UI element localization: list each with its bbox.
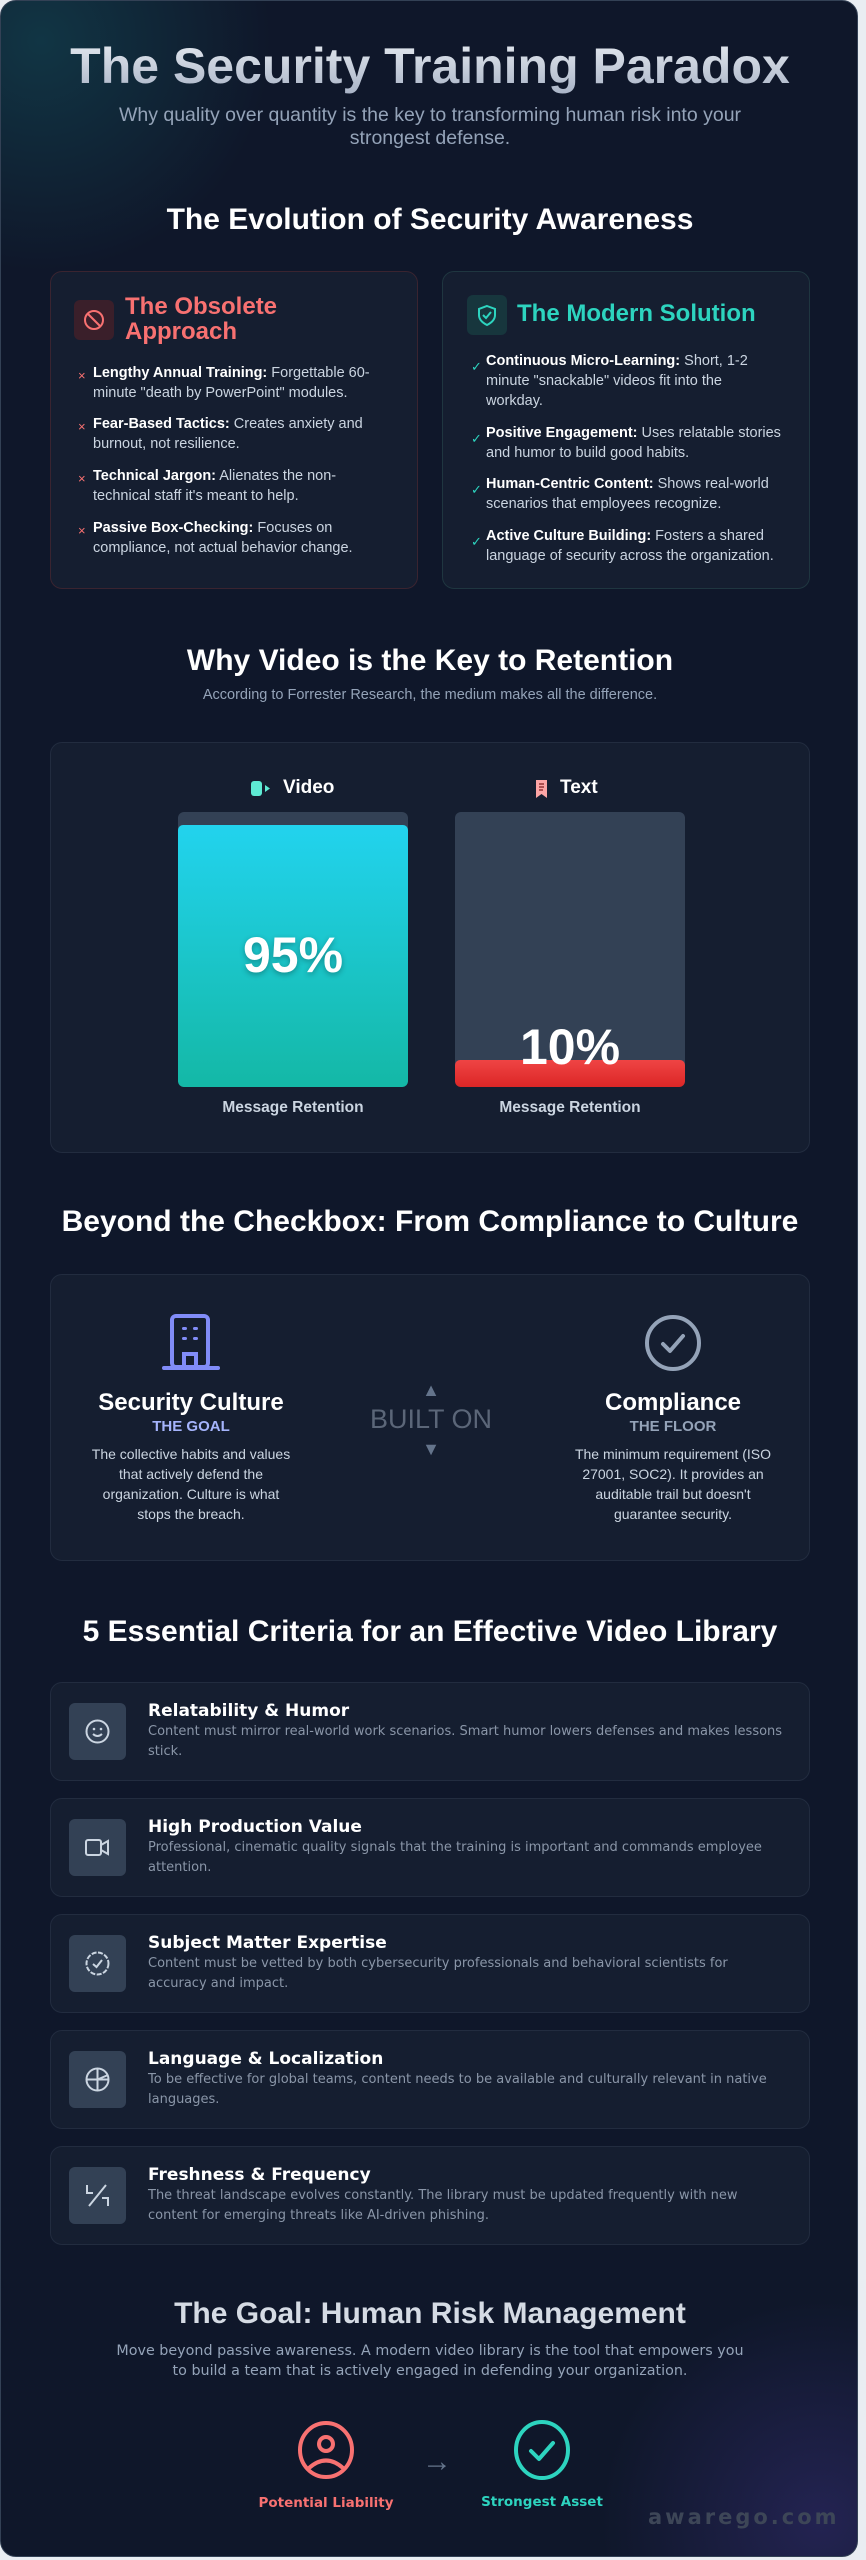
list: modern items: minute "snackable" videos fit into the [486,373,722,389]
heading: obsolete: The Obsolete [125,293,277,320]
list: modern items: Positive Engagement: Uses relatable stories [486,425,781,441]
criterion: production value: High Production Value [148,1817,362,1837]
compliance column: guarantee security. [614,1506,732,1522]
icon: smile [69,1703,126,1760]
legend: video [251,777,334,798]
list: obsolete items: Lengthy Annual Training: Forgettable 60- [93,365,370,381]
list: modern items: ✓ [471,431,482,446]
heading: video retention: Why Video is the Key to Retention [187,644,673,677]
compliance column: THE FLOOR [630,1418,716,1435]
bar: text 10% [455,812,685,1087]
panel: culture vs compliance [50,1274,810,1561]
list: modern items: ✓ [471,482,482,497]
culture column: The collective habits and values [92,1446,290,1462]
list: obsolete items: burnout, not resilience. [93,436,240,452]
list: obsolete items: Passive Box-Checking: Focuses on [93,520,332,536]
subtitle [119,104,741,149]
icon: check circle [645,1315,701,1371]
heading: evolution: The Evolution of Security Awareness [167,203,693,236]
criterion: localization: Language & Localization [148,2049,383,2069]
list: modern items: workday. [486,393,543,409]
goal paragraph: to build a team that is actively engaged in defending your organization. [173,2363,687,2379]
compliance column: auditable trail but doesn't [595,1486,751,1502]
built on connector: ▼ [422,1439,440,1459]
heading: 5 criteria: 5 Essential Criteria for an Effective Video Library [83,1615,777,1648]
culture column: THE GOAL [152,1418,230,1435]
icon: video camera [69,1819,126,1876]
label: message retention text: Message Retention [499,1099,641,1116]
icon: shield [467,295,507,335]
criterion: freshness: The threat landscape evolves constantly. The library must be updated frequently with new content for emerging threats like AI-driven phishing. [148,2188,738,2223]
panel: obsolete approach [50,271,418,589]
arrow: → [422,2445,452,2478]
list: obsolete items: × [78,471,86,486]
list: obsolete items: Fear-Based Tactics: Creates anxiety and [93,416,363,432]
compliance column [575,1315,771,1522]
icon: building [162,1314,220,1370]
icon: potential liability [258,2421,394,2511]
heading: the goal: The Goal: Human Risk Management [174,2297,686,2330]
list: modern items: ✓ [471,359,482,374]
heading: obsolete [125,293,277,345]
criterion: relatability: Content must mirror real-world work scenarios. Smart humor lowers defenses and makes lessons stick. [148,1724,782,1759]
culture column: that actively defend the [119,1466,263,1482]
list: obsolete items: × [78,368,86,383]
criterion: production value: Professional, cinematic quality signals that the training is important and commands employee attention. [148,1840,762,1875]
culture column: stops the breach. [137,1506,245,1522]
culture column: Security Culture [98,1389,284,1416]
bar: text 10%: 10% [520,1019,620,1075]
heading: obsolete: Approach [125,318,237,345]
list: modern items: ✓ [471,534,482,549]
list: obsolete items: technical staff it's meant to help. [93,488,299,504]
chart panel [50,742,810,1153]
legend: text: Text [560,777,598,798]
label: message retention video: Message Retention [222,1099,364,1116]
bar: video 95%: 95% [243,927,343,983]
compliance column: Compliance [605,1389,741,1416]
icon: strongest asset [481,2420,603,2510]
list: obsolete items [78,365,370,556]
criterion: relatability [50,1682,810,1781]
list: obsolete items: × [78,523,86,538]
criterion: freshness: Freshness & Frequency [148,2165,371,2185]
subtitle: forrester: According to Forrester Research, the medium makes all the difference. [203,687,657,703]
goal paragraph: Move beyond passive awareness. A modern video library is the tool that empowers you [116,2343,744,2359]
panel: modern solution: language of security across the organization. [486,548,774,564]
criterion: localization [50,2030,810,2129]
list: modern items: Active Culture Building: Fosters a shared [486,528,764,544]
culture column: organization. Culture is what [103,1486,279,1502]
criterion: localization: To be effective for global teams, content needs to be available and culturally relevant in native languages. [148,2072,767,2107]
icon: potential liability: Potential Liability [258,2495,394,2511]
subtitle: strongest defense. [350,127,510,149]
compliance column: The minimum requirement (ISO [575,1446,771,1462]
icon: refresh arrows [69,2167,126,2224]
criterion: relatability: Relatability & Humor [148,1701,349,1721]
watermark: awarego.com [648,2505,840,2529]
built on connector [370,1380,492,1459]
criterion: expertise [50,1914,810,2013]
list: modern items [471,353,781,564]
list: obsolete items: × [78,419,86,434]
icon: ban [74,300,114,340]
built on connector: ▲ [422,1380,440,1400]
list: obsolete items: Technical Jargon: Alienates the non- [93,468,336,484]
compliance column: 27001, SOC2). It provides an [582,1466,764,1482]
heading: modern: The Modern Solution [517,300,756,327]
panel: obsolete approach: compliance, not actual behavior change. [93,540,353,556]
subtitle: Why quality over quantity is the key to transforming human risk into your [119,104,741,126]
legend: video: Video [283,777,334,798]
criterion: production value [50,1798,810,1897]
icon: globe [69,2051,126,2108]
panel: modern solution [442,271,810,589]
heading: compliance to culture: Beyond the Checkbox: From Compliance to Culture [62,1205,798,1238]
list: modern items: Continuous Micro-Learning: Short, 1-2 [486,353,748,369]
criterion: expertise: Content must be vetted by both cybersecurity professionals and behavioral scientists for accuracy and impact. [148,1956,728,1991]
legend: text [536,777,598,798]
list: modern items: Human-Centric Content: Shows real-world [486,476,769,492]
list: modern items: scenarios that employees recognize. [486,496,721,512]
criterion: expertise: Subject Matter Expertise [148,1933,387,1953]
criterion: freshness [50,2146,810,2245]
list: modern items: and humor to build good habits. [486,445,689,461]
bar: video 95% [178,812,408,1087]
title: The Security Training Paradox [70,38,790,94]
goal paragraph [116,2343,744,2379]
icon: strongest asset: Strongest Asset [481,2494,603,2510]
icon: badge check [69,1935,126,1992]
built on connector: BUILT ON [370,1404,492,1434]
list: obsolete items: minute "death by PowerPoint" modules. [93,385,348,401]
culture column [92,1314,290,1522]
